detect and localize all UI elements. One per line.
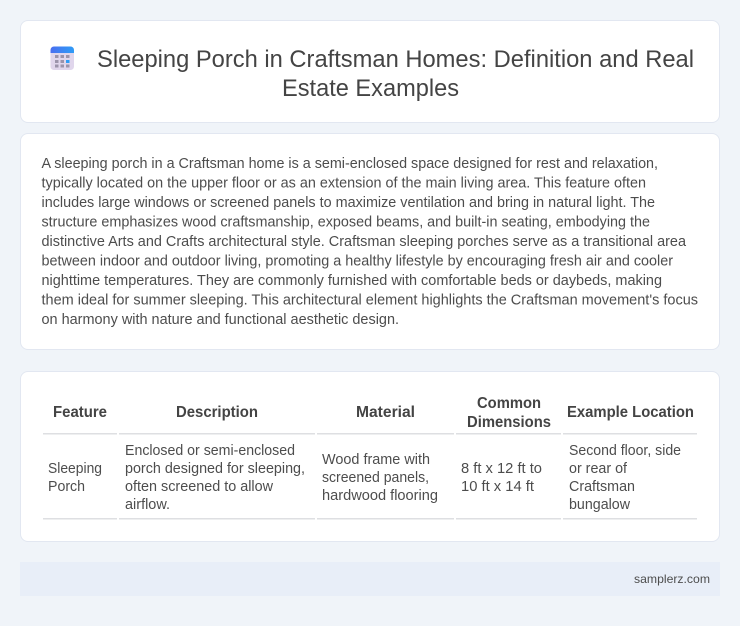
table data row: screened panels,: [322, 470, 429, 486]
table data row: or rear of: [569, 461, 628, 477]
table data row: bungalow: [569, 497, 631, 513]
text block: sleeping porch description: [42, 156, 698, 328]
table header row: Dimensions: [467, 414, 551, 431]
table data row: 10 ft x 14 ft: [461, 479, 534, 495]
title: Estate Examples: [282, 75, 459, 102]
table data row: Porch: [48, 479, 85, 495]
title: [97, 46, 694, 102]
text block: sleeping porch description: structure emphasizes wood craftsmanship, exposed beams, and built-in seating, embodying the: [42, 214, 650, 230]
panel: feature table: [20, 371, 720, 542]
text block: sleeping porch description: them ideal for summer sleeping. This architectural element highlights the Craftsman movement's focus: [42, 292, 698, 308]
footer source text: samplerz.com: [634, 572, 710, 586]
text block: sleeping porch description: distinctive Arts and Crafts architectural style. Craftsman sleeping porches serve as a transitional area: [42, 234, 686, 250]
text block: sleeping porch description: A sleeping porch in a Craftsman home is a semi-enclosed space designed for rest and relaxation,: [42, 156, 658, 172]
table data row: 8 ft x 12 ft to: [461, 461, 542, 477]
text block: sleeping porch description: on harmony with nature and functional aesthetic design.: [42, 312, 399, 328]
table data row: Wood frame with: [322, 452, 430, 468]
table data row: Enclosed or semi-enclosed: [125, 443, 295, 459]
table data row: porch designed for sleeping,: [125, 461, 305, 477]
icon: calendar: [50, 46, 74, 70]
table data row: Second floor, side: [569, 443, 681, 459]
table data row: [48, 443, 681, 513]
title: Sleeping Porch in Craftsman Homes: Definition and Real: [97, 46, 694, 73]
panel: description paragraph: [20, 133, 720, 350]
table header row: Feature: [53, 404, 107, 421]
table header row: Example Location: [567, 404, 694, 421]
table data row: Craftsman: [569, 479, 635, 495]
text block: sleeping porch description: includes large windows or screened panels to maximize ventilation and bring in natural light. The: [42, 195, 655, 211]
table data row: often screened to allow: [125, 479, 274, 495]
table data row: Sleeping: [48, 461, 102, 477]
table header row: [53, 395, 694, 431]
panel: title card: [20, 20, 720, 123]
table header row: Common: [477, 395, 541, 412]
text block: sleeping porch description: between indoor and outdoor living, promoting a healthy lifestyle by encouraging fresh air and cooler: [42, 254, 673, 270]
table header row: Material: [356, 404, 415, 421]
footer bar: [20, 562, 720, 596]
table data row: airflow.: [125, 497, 170, 513]
text block: sleeping porch description: nighttime temperatures. They are commonly furnished with comfortable beds or daybeds, making: [42, 273, 662, 289]
table data row: hardwood flooring: [322, 488, 438, 504]
text block: sleeping porch description: typically located on the upper floor or as an extension of the main living area. This feature often: [42, 176, 646, 192]
table header row: Description: [176, 404, 258, 421]
